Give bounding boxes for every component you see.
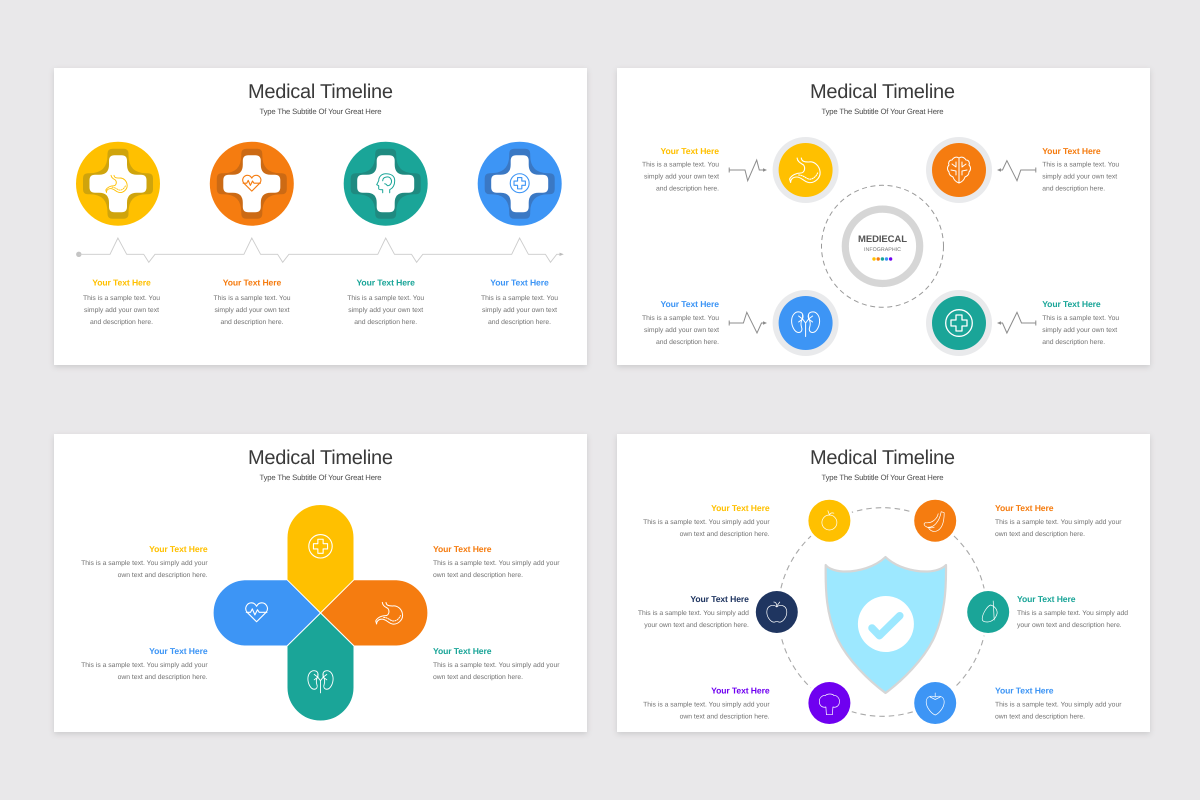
- text: step 4: and description here.: [488, 319, 551, 326]
- text: step 3: [347, 277, 424, 326]
- icon: banana: [911, 497, 959, 545]
- subtitle: Type The Subtitle Of Your Great Here: [260, 473, 382, 482]
- text: step 4: simply add your own text: [482, 307, 557, 314]
- text: upper right: own text and description here.: [433, 572, 523, 579]
- text: middle right: [1017, 594, 1128, 629]
- petal: bottom teal: [287, 613, 354, 721]
- text: top right: This is a sample text. You simply add your: [995, 519, 1122, 526]
- text: top left: Your Text Here: [711, 503, 770, 513]
- text: lower left: This is a sample text. You simply add your: [81, 662, 208, 669]
- icon: mango: [964, 588, 1012, 636]
- petal: right orange: [320, 580, 428, 646]
- text: bottom left: Your Text Here: [660, 299, 719, 309]
- text: lower left: [81, 646, 208, 681]
- panel: petal cross: [54, 434, 587, 732]
- text: lower right: This is a sample text. You simply add your: [433, 662, 560, 669]
- text: lower right: [433, 646, 560, 681]
- text: step 2: simply add your own text: [214, 307, 290, 314]
- text: bottom left: own text and description here.: [680, 713, 770, 720]
- panel: hub diagram: [617, 68, 1150, 365]
- icon: kidney node: [773, 290, 839, 356]
- text: upper right: [433, 544, 560, 579]
- text: top right: Your Text Here: [995, 503, 1054, 513]
- icon: plus: [309, 535, 332, 558]
- text: bottom left: Your Text Here: [711, 686, 770, 696]
- text: step 3: Your Text Here: [356, 277, 415, 287]
- text: upper left: [81, 544, 208, 579]
- title: Medical Timeline: [248, 81, 393, 103]
- text: middle right: your own text and description here.: [1017, 622, 1122, 629]
- text: bottom right: simply add your own text: [1042, 327, 1117, 334]
- title: Medical Timeline: [810, 447, 955, 469]
- text: bottom right: Your Text Here: [995, 686, 1054, 696]
- text: top left: This is a sample text. You: [642, 162, 719, 169]
- text: step 4: Your Text Here: [490, 277, 549, 287]
- center hub: MEDIECAL: [858, 234, 907, 245]
- text: top left: simply add your own text: [644, 174, 719, 181]
- title: Medical Timeline: [248, 447, 393, 469]
- shield: [826, 557, 946, 693]
- dashed ring: [778, 508, 987, 716]
- text: step 1: This is a sample text. You: [83, 295, 160, 302]
- text: upper left: This is a sample text. You simply add your: [81, 560, 208, 567]
- text: bottom right: and description here.: [1042, 339, 1105, 346]
- text: top right: own text and description here.: [995, 531, 1085, 538]
- panel: shield ring: [617, 434, 1150, 732]
- text: bottom right: This is a sample text. You: [1042, 315, 1119, 322]
- icon: strawberry: [911, 679, 959, 727]
- text: step 3: This is a sample text. You: [347, 295, 424, 302]
- text: middle left: [638, 594, 749, 629]
- text: lower right: own text and description here.: [433, 674, 523, 681]
- text: lower left: own text and description here.: [118, 674, 208, 681]
- arrow: pulse top right: [997, 161, 1036, 181]
- center hub: INFOGRAPHIC: [864, 247, 901, 253]
- text: step 2: and description here.: [220, 319, 284, 326]
- text: bottom left: simply add your own text: [644, 327, 719, 334]
- icon: stomach cross: [76, 142, 160, 226]
- text: top right: This is a sample text. You: [1042, 162, 1119, 169]
- text: step 3: and description here.: [354, 319, 417, 326]
- subtitle: Type The Subtitle Of Your Great Here: [260, 107, 382, 116]
- text: upper left: Your Text Here: [149, 544, 208, 554]
- text: top right: [1042, 146, 1119, 193]
- text: step 1: simply add your own text: [84, 307, 159, 314]
- text: bottom left: and description here.: [656, 339, 719, 346]
- icon: brain node: [926, 137, 992, 203]
- text: upper right: This is a sample text. You simply add your: [433, 560, 560, 567]
- text: lower right: Your Text Here: [433, 646, 492, 656]
- icon: broccoli: [805, 679, 853, 727]
- text: bottom left: [643, 686, 770, 720]
- text: step 1: Your Text Here: [92, 277, 151, 287]
- text: top left: and description here.: [656, 186, 719, 193]
- petal: left blue: [213, 580, 320, 646]
- arrow: pulse bottom left: [729, 312, 767, 333]
- text: middle right: Your Text Here: [1017, 594, 1076, 604]
- text: top right: Your Text Here: [1042, 146, 1101, 156]
- title: Medical Timeline: [810, 81, 955, 103]
- text: step 4: [481, 277, 558, 326]
- icon: stomach node: [773, 137, 839, 203]
- text: middle left: Your Text Here: [690, 594, 749, 604]
- icon: plus node: [926, 290, 992, 356]
- text: top left: own text and description here.: [680, 531, 770, 538]
- text: top right: [995, 503, 1122, 538]
- text: bottom right: [995, 686, 1122, 720]
- center hub: [822, 185, 944, 307]
- icon: stomach: [376, 602, 403, 624]
- text: step 3: simply add your own text: [348, 307, 423, 314]
- text: middle left: This is a sample text. You simply add: [638, 610, 749, 617]
- text: top left: [642, 146, 719, 193]
- text: upper right: Your Text Here: [433, 544, 492, 554]
- arrow: pulse bottom right: [997, 312, 1036, 333]
- text: step 4: This is a sample text. You: [481, 295, 558, 302]
- text: top left: Your Text Here: [660, 146, 719, 156]
- icon: heart: [246, 603, 267, 622]
- petal: top yellow: [287, 505, 354, 613]
- text: step 1: and description here.: [90, 319, 153, 326]
- heartbeat timeline: [76, 238, 564, 262]
- icon: heart cross: [210, 142, 294, 226]
- text: top left: [643, 503, 770, 538]
- text: top right: simply add your own text: [1042, 174, 1117, 181]
- text: upper left: own text and description here.: [118, 572, 208, 579]
- text: bottom left: [642, 299, 719, 346]
- text: step 2: This is a sample text. You: [214, 295, 291, 302]
- text: step 1: [83, 277, 160, 326]
- icon: medical plus cross: [478, 142, 562, 226]
- text: top right: and description here.: [1042, 186, 1105, 193]
- arrow: pulse top left: [729, 160, 767, 181]
- icon: orange: [805, 497, 853, 545]
- icon: apple: [753, 588, 801, 636]
- icon: kidney: [308, 671, 333, 693]
- text: bottom right: [1042, 299, 1119, 346]
- text: lower left: Your Text Here: [149, 646, 208, 656]
- text: step 2: [214, 277, 291, 326]
- subtitle: Type The Subtitle Of Your Great Here: [822, 473, 944, 482]
- text: step 2: Your Text Here: [223, 277, 281, 287]
- text: middle right: This is a sample text. You simply add: [1017, 610, 1128, 617]
- text: bottom left: This is a sample text. You simply add your: [643, 701, 770, 708]
- text: bottom right: own text and description here.: [995, 713, 1085, 720]
- text: middle left: your own text and description here.: [644, 622, 749, 629]
- panel: cross timeline: [54, 68, 587, 365]
- subtitle: Type The Subtitle Of Your Great Here: [822, 107, 944, 116]
- text: bottom right: This is a sample text. You simply add your: [995, 701, 1122, 708]
- text: top left: This is a sample text. You simply add your: [643, 519, 770, 526]
- icon: head cross: [344, 142, 428, 226]
- text: bottom right: Your Text Here: [1042, 299, 1101, 309]
- text: bottom left: This is a sample text. You: [642, 315, 719, 322]
